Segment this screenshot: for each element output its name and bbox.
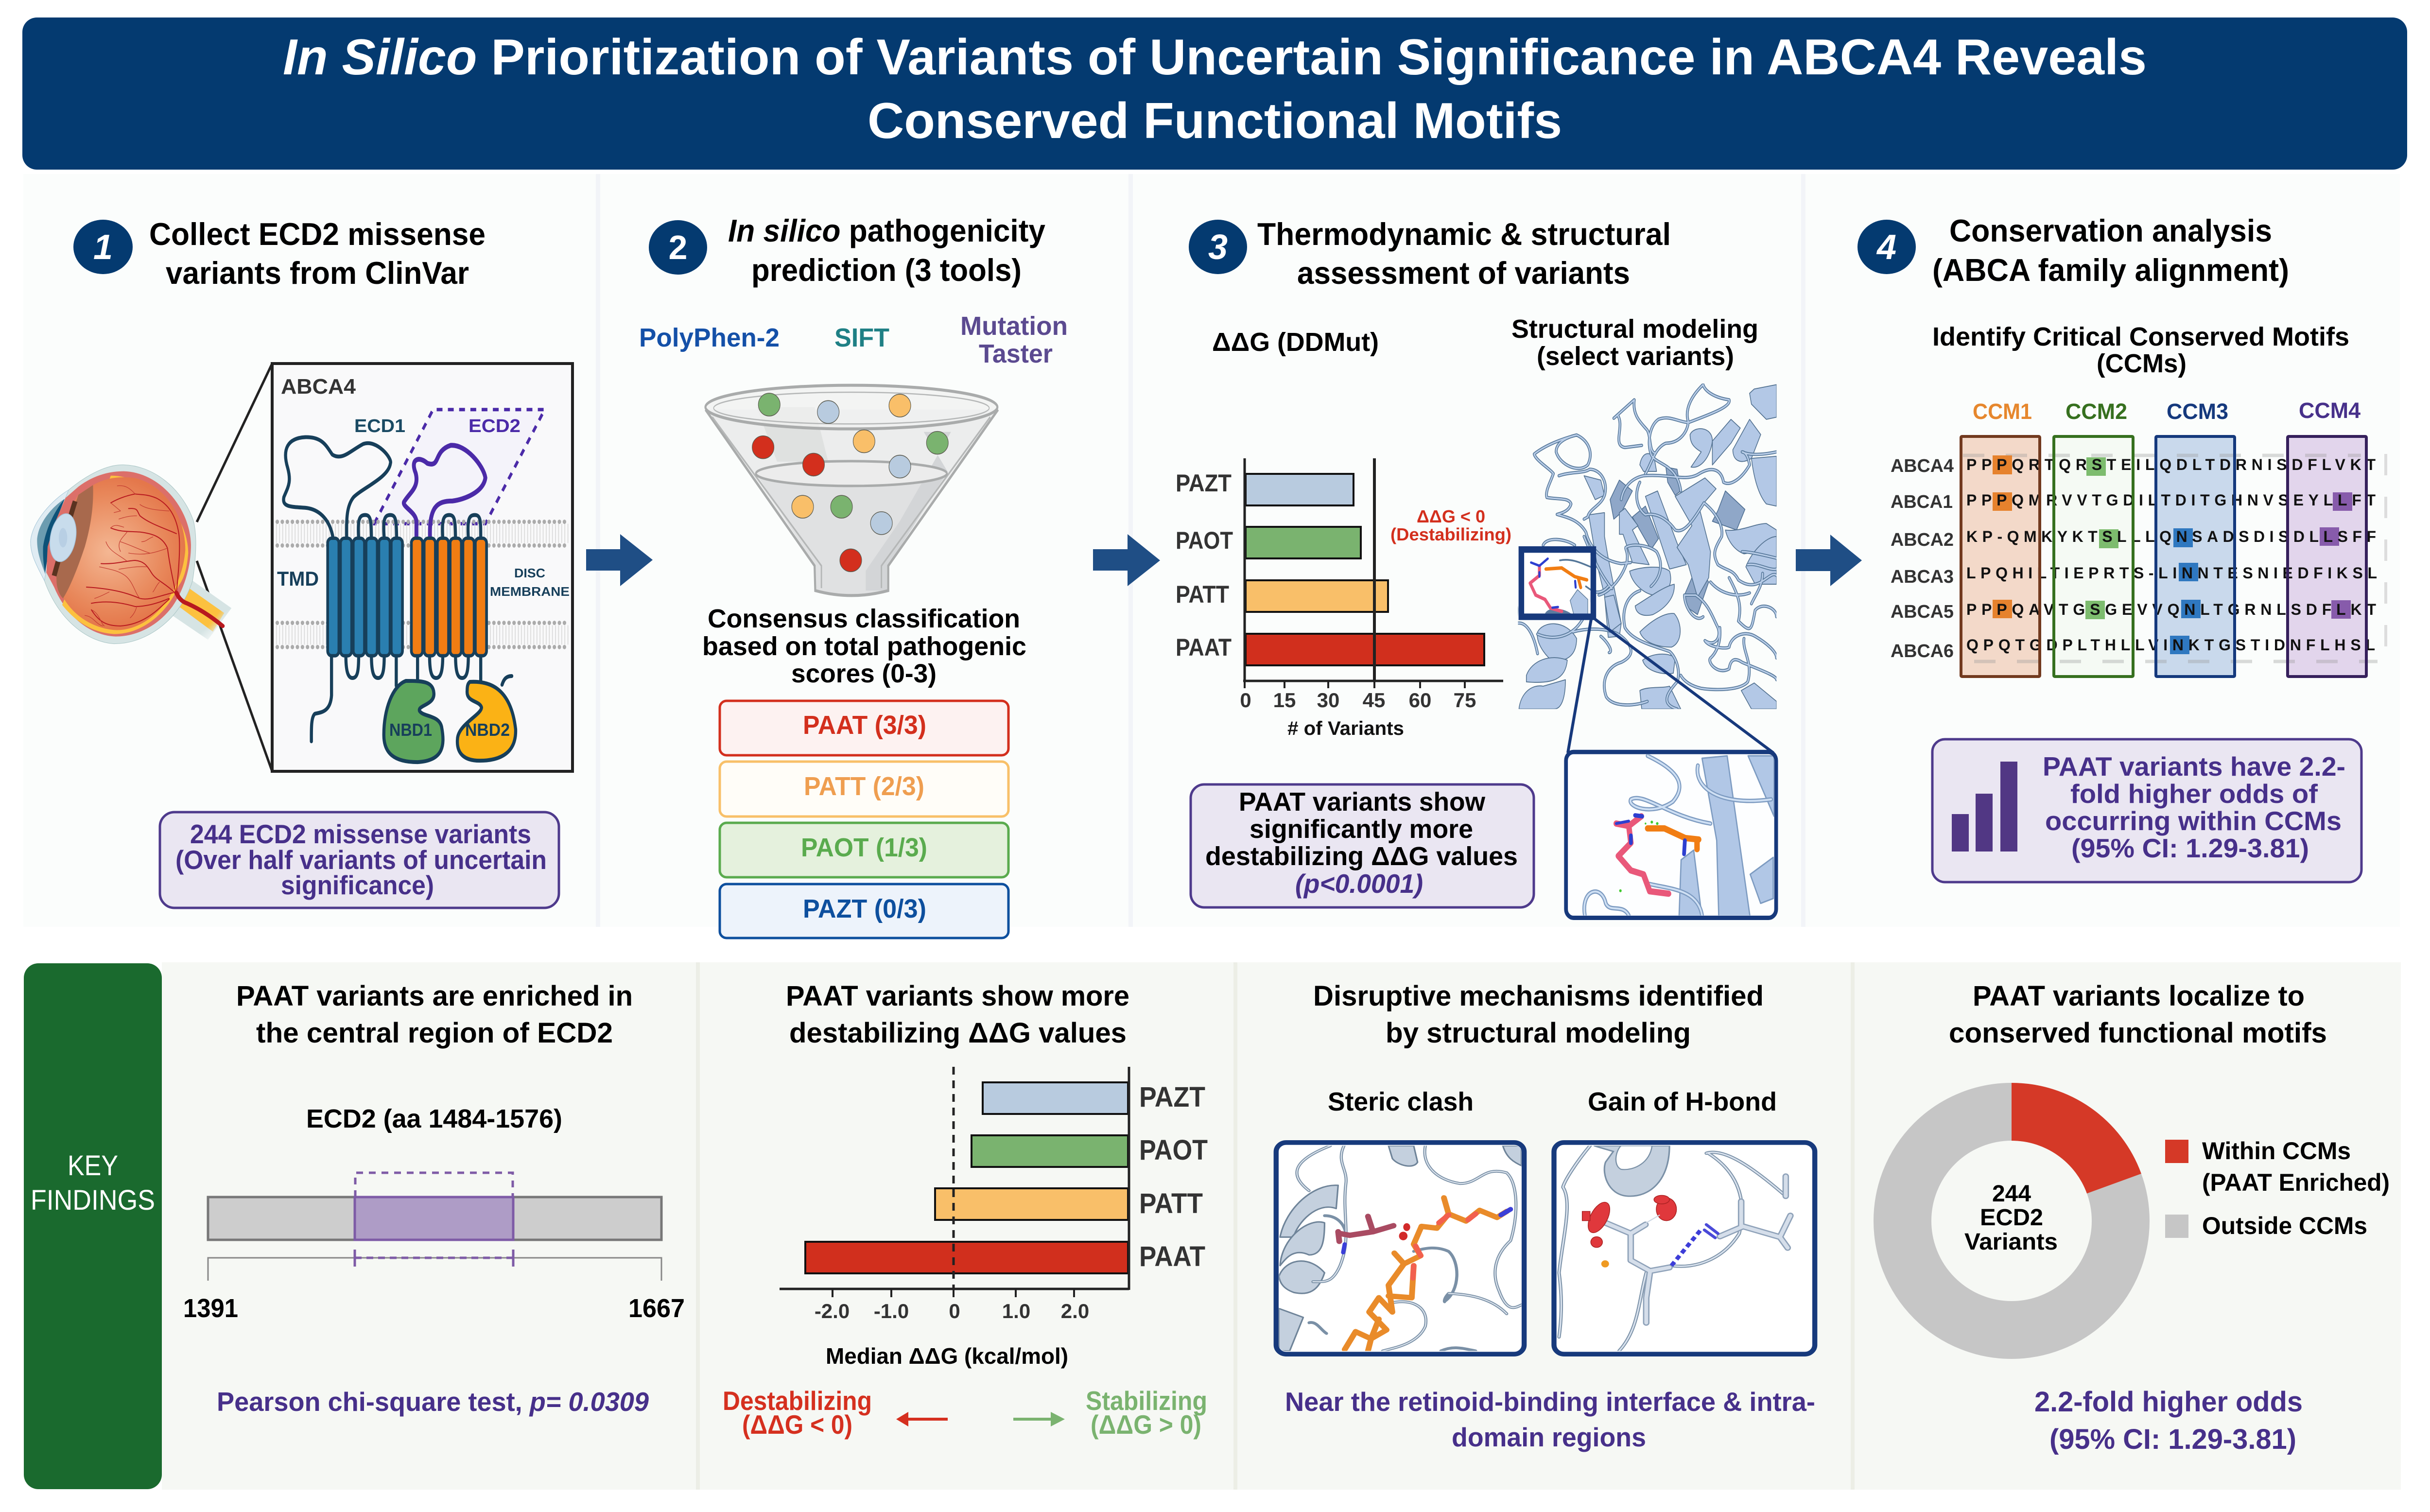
odds statistic: 2.2-fold higher odds bbox=[2034, 1386, 2303, 1418]
CCM labels: CCM2 bbox=[2066, 399, 2127, 424]
panel backgrounds bbox=[23, 174, 2400, 927]
key findings label: FINDINGS bbox=[31, 1184, 155, 1216]
bar chart: variants: 30 bbox=[1317, 689, 1339, 712]
diagram: ABCA4 topology: DISC bbox=[514, 566, 545, 580]
bar chart: median ddG: PAOT bbox=[1139, 1134, 1208, 1166]
sequence alignment: PPPQAVTGSGEVVQNLTGRNLSDFLKT bbox=[1966, 601, 2376, 618]
class box: PAOT: PAOT (1/3) bbox=[801, 833, 927, 862]
step 1 badge: 1 bbox=[93, 228, 113, 267]
step 3 heading: assessment of variants bbox=[1297, 255, 1630, 291]
step 3 heading bbox=[1257, 216, 1671, 291]
zoom lines to inset bbox=[1568, 619, 1773, 753]
arrow: step 3 to 4 bbox=[1796, 535, 1862, 586]
consensus text: based on total pathogenic bbox=[702, 632, 1026, 661]
sequence alignment: ABCA3 bbox=[1891, 567, 1954, 587]
bar chart: variants: PAZT bbox=[1176, 469, 1232, 497]
step 2 badge bbox=[649, 220, 707, 275]
sequence alignment bbox=[1891, 436, 2386, 677]
icon: bars bbox=[1952, 762, 2017, 852]
finding 4 heading: PAAT variants localize to bbox=[1973, 980, 2305, 1012]
callout: 2.2-fold odds: occurring within CCMs bbox=[2045, 806, 2342, 836]
callout: 2.2-fold odds: fold higher odds of bbox=[2070, 779, 2318, 809]
callout: PAAT destabilizing bbox=[1191, 784, 1534, 907]
zoom lines to ABCA4 box bbox=[197, 364, 272, 771]
step 4 badge: 4 bbox=[1876, 228, 1896, 267]
tool names: Mutation bbox=[960, 312, 1068, 341]
title banner: Conserved Functional Motifs bbox=[868, 93, 1562, 149]
diagram: ABCA4 topology: ECD1 bbox=[354, 416, 405, 436]
finding 4 heading: conserved functional motifs bbox=[1949, 1017, 2327, 1049]
sequence alignment: ABCA2 bbox=[1891, 530, 1954, 550]
bar chart: variants bbox=[1176, 458, 1503, 739]
protein structure image bbox=[1504, 384, 1776, 709]
consensus text bbox=[702, 604, 1026, 688]
stabilizing direction bbox=[1013, 1386, 1207, 1440]
subheading: CCMs: Identify Critical Conserved Motifs bbox=[1932, 322, 2349, 351]
bar chart: variants: PATT bbox=[1176, 581, 1229, 608]
finding 4: donut chart bbox=[1902, 980, 2390, 1455]
CCM labels: CCM1 bbox=[1973, 399, 2032, 424]
arrow: step 2 to 3 bbox=[1093, 534, 1160, 586]
class box: PATT bbox=[720, 762, 1008, 817]
sequence alignment: LPQHILTIEPRTS-LINNTESNIEDFIKSL bbox=[1966, 564, 2377, 582]
subheading: DDMut: ΔΔG (DDMut) bbox=[1212, 328, 1379, 357]
diagram: ABCA4 topology: ECD2 bbox=[469, 416, 521, 436]
bar chart: variants: 60 bbox=[1409, 689, 1431, 712]
bar chart: median ddG: 0 bbox=[949, 1300, 960, 1322]
legend: (PAAT Enriched) bbox=[2202, 1169, 2390, 1196]
bar chart: median ddG: -2.0 bbox=[815, 1300, 850, 1322]
sequence alignment: ABCA4 bbox=[1891, 456, 1954, 476]
bar chart: median ddG: PATT bbox=[1139, 1188, 1203, 1219]
finding 3: disruptive mechanisms bbox=[1276, 980, 1815, 1452]
destabilizing direction: (ΔΔG < 0) bbox=[742, 1409, 852, 1440]
callout: PAAT destabilizing: significantly more bbox=[1250, 815, 1473, 844]
diagram: ABCA4 topology: NBD1 bbox=[389, 720, 432, 740]
callout: 2.2-fold odds: (95% CI: 1.29-3.81) bbox=[2071, 833, 2309, 863]
sequence alignment: PPPQMRVVTGDILTDITGHNVSEYLLFT bbox=[1966, 491, 2376, 509]
destabilizing direction: Destabilizing bbox=[723, 1386, 872, 1416]
domain bar: 1391 bbox=[183, 1294, 238, 1323]
structural conclusion bbox=[1285, 1387, 1815, 1452]
callout: 244 variants: (Over half variants of uncertain bbox=[175, 845, 547, 875]
donut chart: 244 bbox=[1992, 1181, 2031, 1207]
finding 2 heading: PAAT variants show more bbox=[786, 980, 1129, 1012]
step 2 heading: prediction (3 tools) bbox=[751, 252, 1022, 288]
panel: step 1 collect variants bbox=[31, 216, 573, 908]
structural conclusion: domain regions bbox=[1452, 1422, 1646, 1452]
key findings label: KEY bbox=[68, 1150, 118, 1182]
arrow: step 1 to 2 bbox=[586, 534, 653, 586]
legend bbox=[2165, 1137, 2390, 1239]
annotation: destabilizing threshold: ΔΔG < 0 bbox=[1417, 506, 1485, 526]
donut chart: ECD2 bbox=[1980, 1205, 2043, 1231]
finding 2 heading: destabilizing ΔΔG values bbox=[789, 1017, 1127, 1049]
subheading: structural modeling: Structural modeling bbox=[1511, 314, 1758, 344]
stabilizing direction: Stabilizing bbox=[1086, 1386, 1207, 1416]
donut chart bbox=[1902, 1083, 2141, 1330]
class box: PAZT bbox=[720, 884, 1008, 938]
sequence alignment: PPPQRTQRSTEILQDLTDRNISDFLVKT bbox=[1966, 456, 2376, 473]
subheading: structural modeling: (select variants) bbox=[1537, 342, 1734, 371]
finding 3 heading: Disruptive mechanisms identified bbox=[1313, 980, 1764, 1012]
finding 3 heading bbox=[1313, 980, 1764, 1049]
legend: Within CCMs bbox=[2202, 1137, 2351, 1164]
inset: variant close-up bbox=[1566, 752, 1776, 918]
subheading: CCMs: (CCMs) bbox=[2097, 349, 2187, 378]
H-bond label: Gain of H-bond bbox=[1588, 1087, 1777, 1116]
tool names: Taster bbox=[979, 339, 1053, 368]
steric clash label: Steric clash bbox=[1328, 1087, 1474, 1116]
bar chart: median ddG: 1.0 bbox=[1002, 1300, 1030, 1322]
sequence alignment: ABCA5 bbox=[1891, 602, 1954, 622]
callout: PAAT destabilizing: (p<0.0001) bbox=[1295, 869, 1423, 899]
bar chart: median ddG bbox=[780, 1067, 1208, 1369]
step 2 badge: 2 bbox=[669, 228, 687, 266]
subheading: structural modeling bbox=[1511, 314, 1758, 371]
step 1 heading bbox=[149, 216, 486, 291]
CCM labels bbox=[1973, 398, 2361, 424]
bar chart: variants: 75 bbox=[1454, 689, 1476, 712]
step 4 heading: Conservation analysis bbox=[1949, 213, 2272, 248]
finding 4 heading bbox=[1949, 980, 2327, 1049]
title banner: In Silico Prioritization of Variants of Uncertain Significance in ABCA4 Reveals bbox=[283, 29, 2147, 86]
step 4 heading: (ABCA family alignment) bbox=[1932, 252, 2289, 288]
chi-square statistic: Pearson chi-square test, p= 0.0309 bbox=[217, 1387, 649, 1417]
bar chart: variants: # of Variants bbox=[1287, 718, 1404, 739]
sequence alignment: KP-QMKYKTSLLLQNSADSDISDLLSFF bbox=[1966, 528, 2376, 545]
tool names: SIFT bbox=[834, 323, 889, 352]
destabilizing direction bbox=[723, 1386, 948, 1440]
annotation: destabilizing threshold bbox=[1390, 506, 1511, 544]
class box: PAZT: PAZT (0/3) bbox=[803, 894, 926, 923]
key findings label bbox=[24, 963, 162, 1489]
step 2 heading: In silico pathogenicity bbox=[728, 213, 1045, 248]
diagram: ABCA4 topology: ABCA4 bbox=[281, 375, 356, 399]
callout: PAAT destabilizing: PAAT variants show bbox=[1239, 787, 1486, 817]
sequence alignment: QPQTGDPLTHLLVINKTGSTIDNFLHSL bbox=[1966, 636, 2375, 654]
panel: step 4 conservation bbox=[1857, 213, 2386, 882]
ECD2 label: ECD2 (aa 1484-1576) bbox=[306, 1104, 562, 1133]
step 1 heading: variants from ClinVar bbox=[166, 255, 469, 291]
class box: PATT: PATT (2/3) bbox=[804, 772, 924, 801]
domain bar: 1667 bbox=[628, 1294, 685, 1323]
bar chart: variants: 45 bbox=[1363, 689, 1385, 712]
diagram: ABCA4 topology: NBD2 bbox=[465, 720, 510, 740]
diagram: ABCA4 topology bbox=[272, 364, 573, 771]
step 3 badge bbox=[1189, 220, 1247, 274]
callout: 244 variants bbox=[160, 812, 559, 908]
bar chart: median ddG: -1.0 bbox=[874, 1300, 909, 1322]
CCM labels: CCM3 bbox=[2167, 399, 2228, 424]
finding 2: median ddG bbox=[723, 980, 1208, 1440]
step 3 badge: 3 bbox=[1208, 228, 1228, 267]
donut chart: Variants bbox=[1964, 1229, 2058, 1255]
step 1 heading: Collect ECD2 missense bbox=[149, 216, 486, 252]
finding 1 heading: the central region of ECD2 bbox=[256, 1017, 613, 1049]
bar chart: variants: PAOT bbox=[1176, 527, 1233, 554]
finding 2 heading bbox=[786, 980, 1129, 1049]
callout: 244 variants: significance) bbox=[281, 870, 434, 900]
step 1 badge bbox=[73, 220, 133, 274]
bar chart: variants: 15 bbox=[1273, 689, 1296, 712]
consensus text: scores (0-3) bbox=[791, 659, 937, 688]
callout: 244 variants: 244 ECD2 missense variants bbox=[190, 819, 531, 849]
annotation: destabilizing threshold: (Destabilizing) bbox=[1390, 524, 1511, 544]
stabilizing direction: (ΔΔG > 0) bbox=[1091, 1409, 1201, 1440]
class box: PAOT bbox=[720, 823, 1008, 877]
callout: 2.2-fold odds: PAAT variants have 2.2- bbox=[2043, 751, 2345, 782]
diagram: ABCA4 topology: TMD bbox=[277, 567, 319, 590]
finding 1 heading: PAAT variants are enriched in bbox=[236, 980, 633, 1012]
structure: steric clash bbox=[1276, 1143, 1524, 1354]
odds statistic: (95% CI: 1.29-3.81) bbox=[2049, 1424, 2296, 1455]
domain bar bbox=[183, 1173, 685, 1323]
sequence alignment: ABCA1 bbox=[1891, 492, 1953, 512]
sequence alignment: ABCA6 bbox=[1891, 641, 1954, 661]
bar chart: variants: 0 bbox=[1240, 689, 1251, 712]
bar chart: median ddG: Median ΔΔG (kcal/mol) bbox=[826, 1343, 1068, 1369]
panel: step 3 thermodynamic bbox=[1176, 216, 1776, 918]
legend: Outside CCMs bbox=[2202, 1212, 2367, 1239]
odds statistic bbox=[2034, 1386, 2303, 1455]
finding 1 heading bbox=[236, 980, 633, 1049]
class box: PAAT: PAAT (3/3) bbox=[803, 711, 926, 740]
subheading: CCMs bbox=[1932, 322, 2349, 378]
icon: funnel with variants bbox=[706, 385, 998, 595]
icon: eye anatomy bbox=[31, 465, 231, 644]
consensus text: Consensus classification bbox=[708, 604, 1020, 633]
class box: PAAT bbox=[720, 701, 1008, 755]
panel: step 2 prediction bbox=[639, 213, 1068, 938]
CCM labels: CCM4 bbox=[2299, 398, 2361, 423]
step 2 heading bbox=[728, 213, 1045, 288]
key findings background bbox=[162, 962, 2401, 1490]
tool names bbox=[639, 312, 1068, 368]
bar chart: median ddG: PAAT bbox=[1139, 1241, 1205, 1272]
bar chart: median ddG: 2.0 bbox=[1061, 1300, 1089, 1322]
finding 3 heading: by structural modeling bbox=[1386, 1017, 1691, 1049]
step 4 badge bbox=[1857, 220, 1916, 274]
callout: 2.2-fold odds bbox=[1932, 739, 2361, 882]
step 3 heading: Thermodynamic & structural bbox=[1257, 216, 1671, 252]
title banner bbox=[22, 17, 2407, 170]
diagram: ABCA4 topology: MEMBRANE bbox=[490, 584, 570, 599]
structure: H-bond bbox=[1554, 1143, 1815, 1354]
tool names: PolyPhen-2 bbox=[639, 323, 780, 352]
callout: PAAT destabilizing: destabilizing ΔΔG values bbox=[1205, 842, 1518, 871]
step 4 heading bbox=[1932, 213, 2289, 288]
finding 1: central enrichment bbox=[183, 980, 685, 1417]
bar chart: variants: PAAT bbox=[1176, 634, 1232, 661]
bar chart: median ddG: PAZT bbox=[1139, 1081, 1205, 1113]
structural conclusion: Near the retinoid-binding interface & intra- bbox=[1285, 1387, 1815, 1417]
